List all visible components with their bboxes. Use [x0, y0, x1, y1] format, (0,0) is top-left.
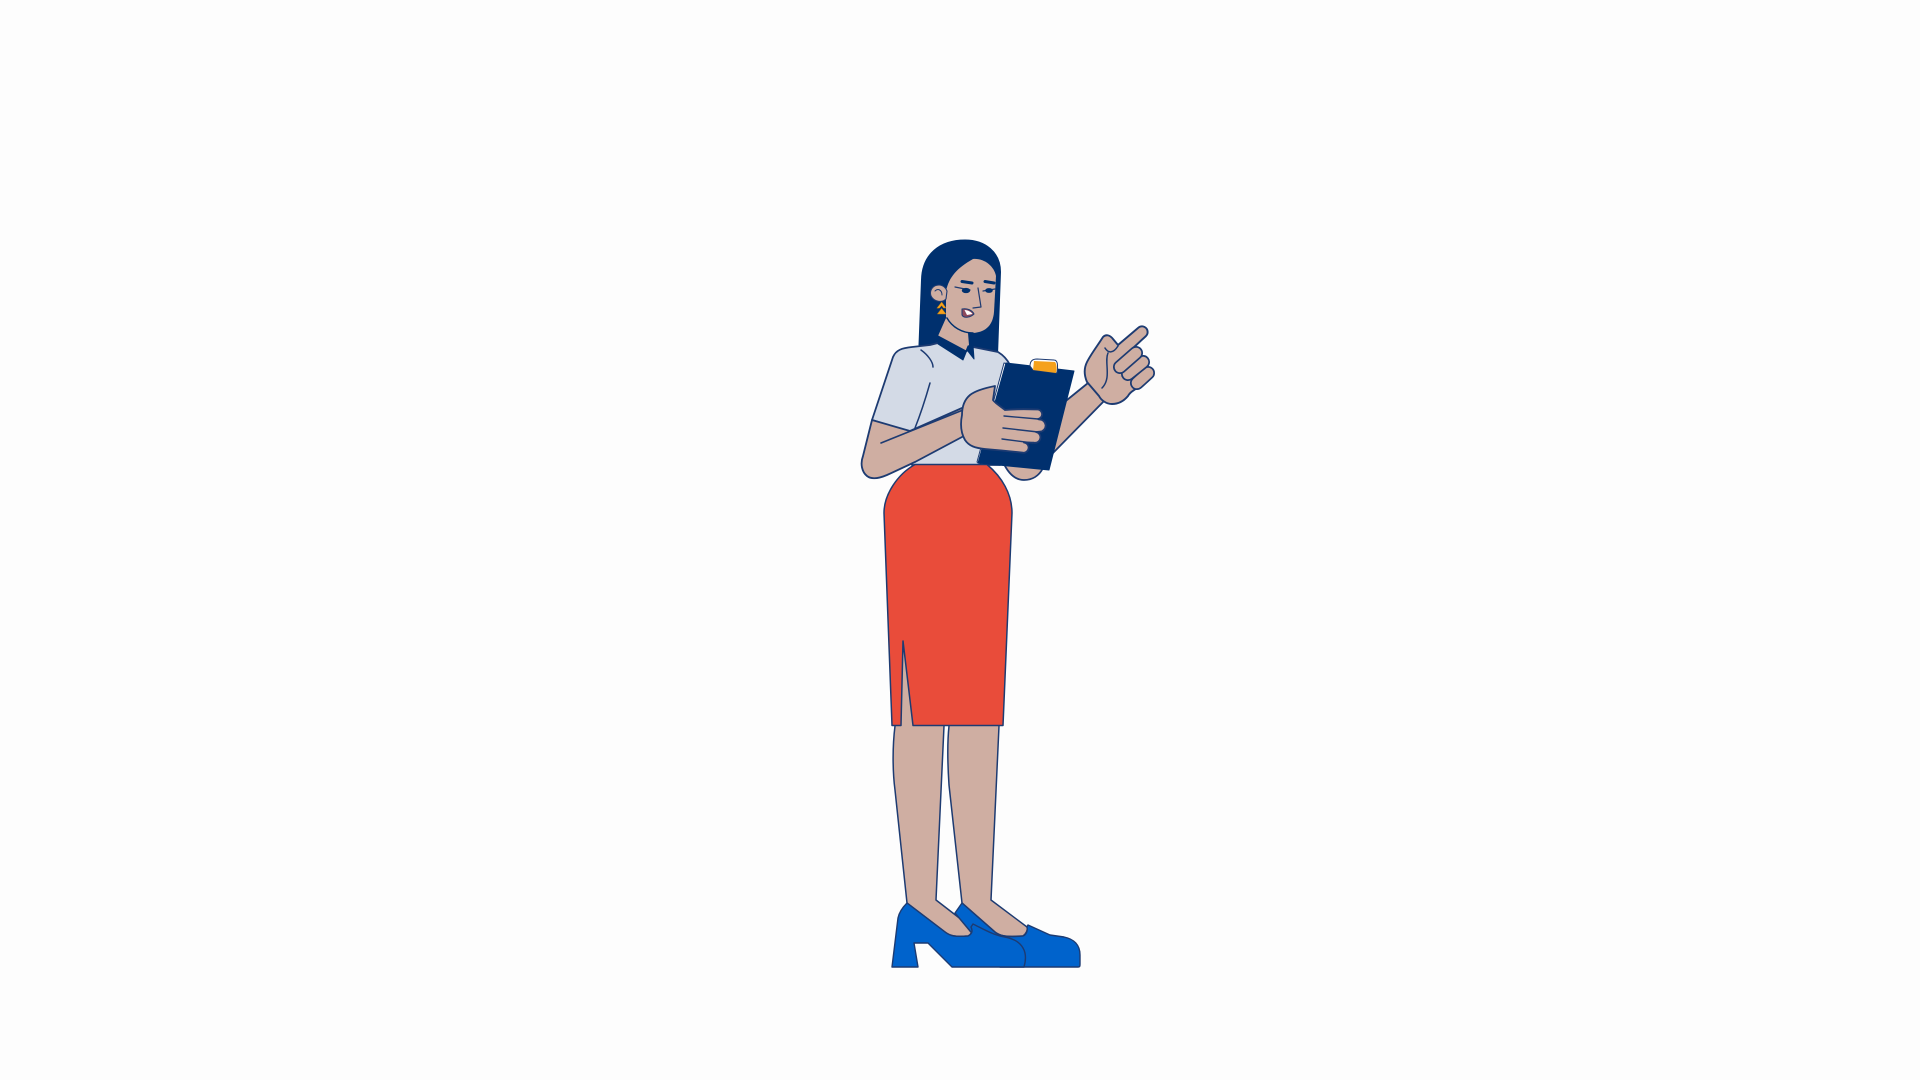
clipboard edge	[977, 363, 1008, 464]
clipboard clip	[1030, 359, 1058, 373]
collar	[938, 336, 974, 360]
nose	[973, 288, 981, 308]
eyebrows	[962, 282, 994, 283]
right shoe	[955, 903, 1080, 967]
clipboard board	[978, 363, 1074, 470]
right arm behind clipboard	[1003, 383, 1106, 480]
pointing hand	[1085, 326, 1150, 404]
fingers	[1120, 353, 1148, 383]
left shoe	[892, 903, 1025, 967]
holding hand	[961, 386, 1046, 453]
ear	[930, 285, 947, 301]
earring	[937, 302, 946, 314]
clipboard	[977, 359, 1074, 470]
eyes	[955, 287, 995, 293]
thumb crease	[1102, 346, 1118, 388]
mouth	[962, 309, 974, 317]
skirt	[884, 464, 1012, 726]
legs	[893, 630, 1027, 936]
jaw line	[947, 318, 973, 333]
face	[930, 259, 996, 333]
left arm	[862, 408, 975, 478]
hair	[919, 240, 1000, 355]
shirt	[872, 343, 1010, 465]
palm and index finger	[1085, 326, 1150, 404]
neck	[938, 318, 969, 351]
